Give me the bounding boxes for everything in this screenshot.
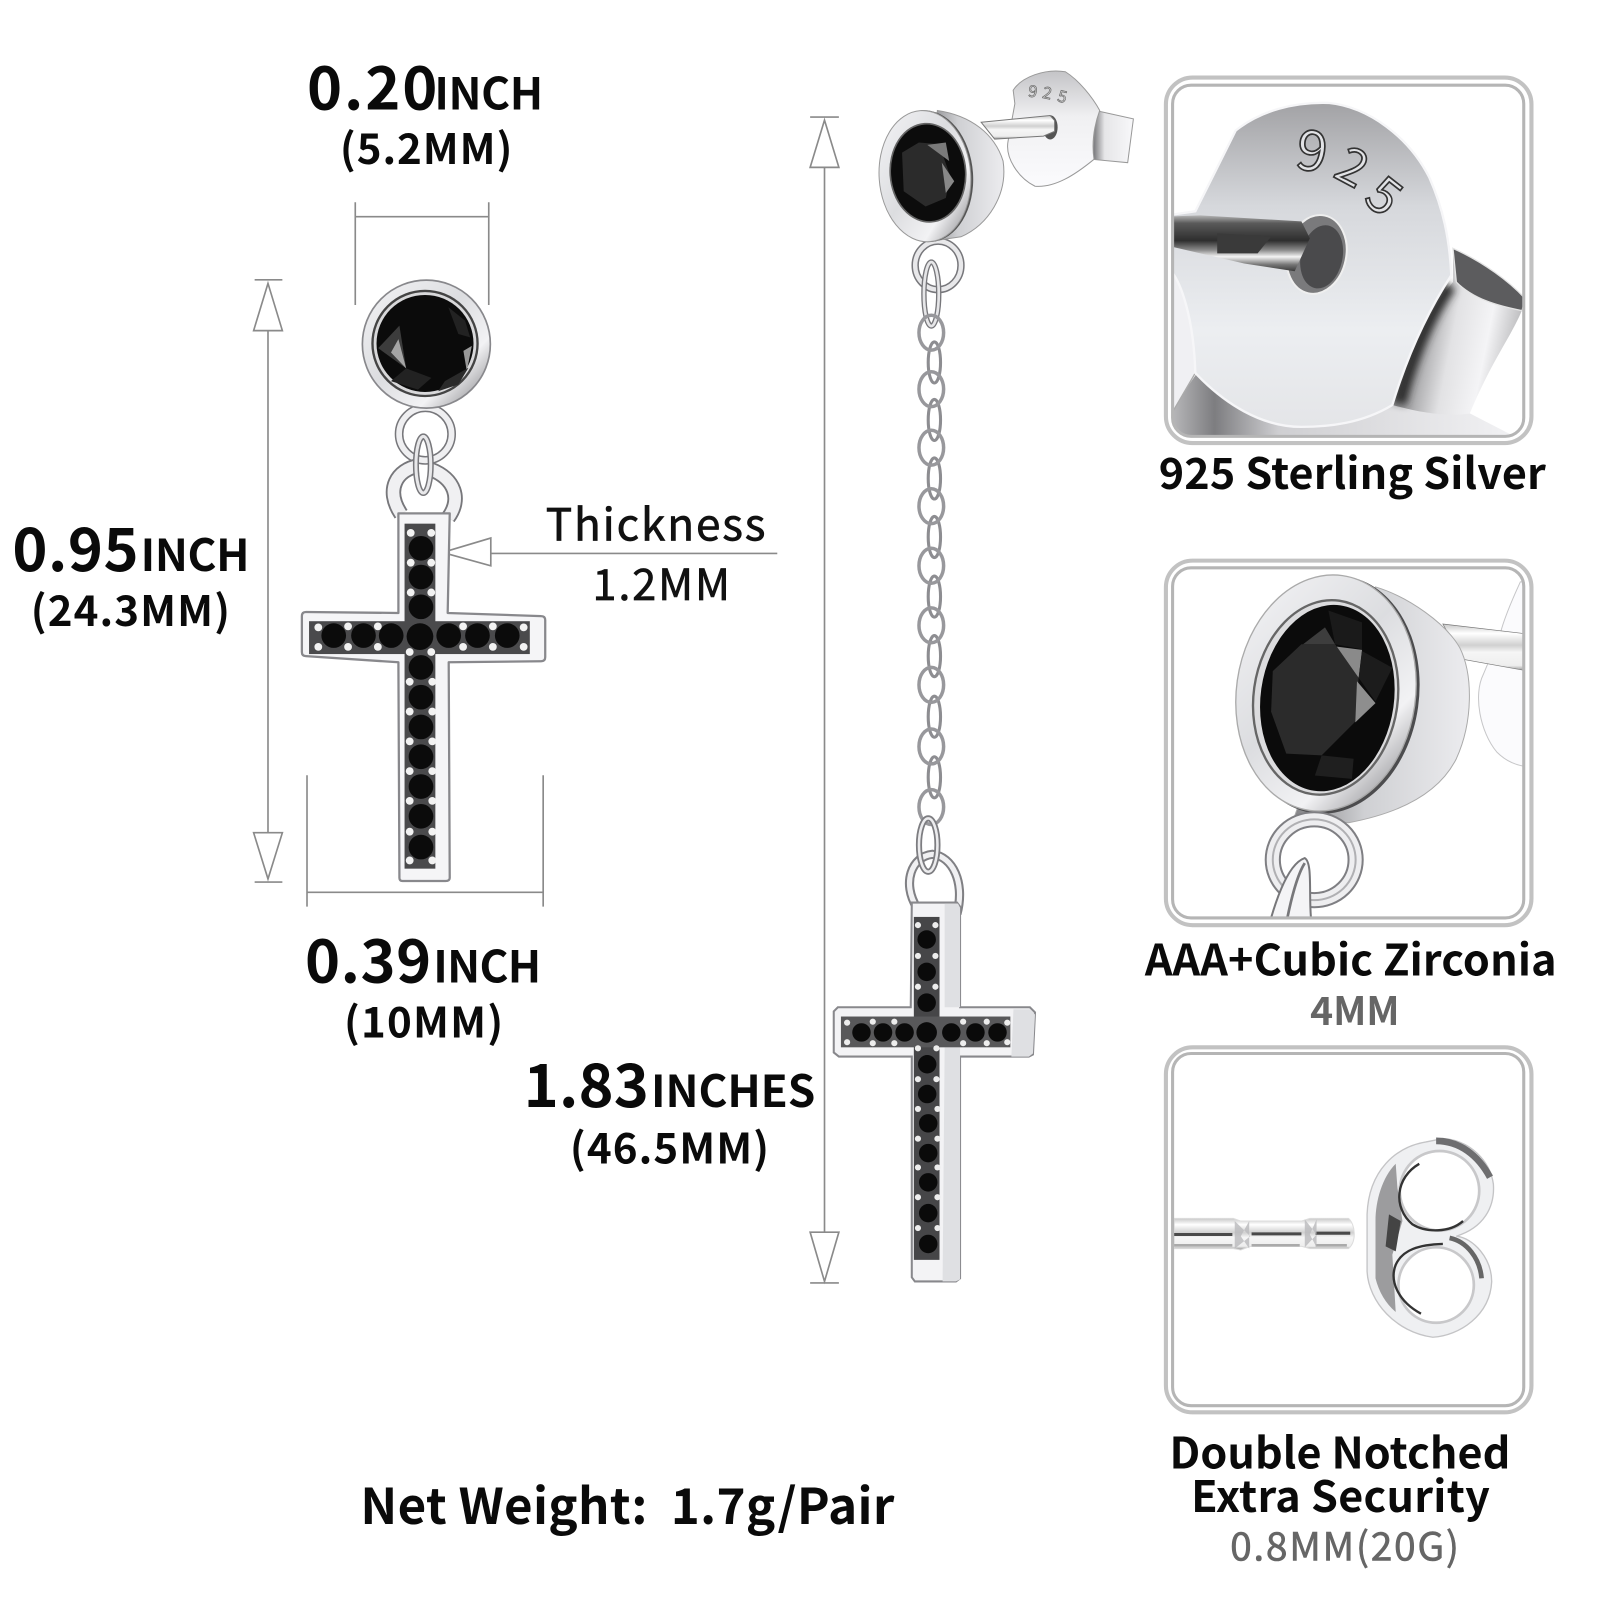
panel: 925 sterling silver close-up [1166, 78, 1531, 444]
label: stud width [307, 41, 543, 177]
long earring: cross stones [852, 930, 1007, 1253]
close-up image: ear nut back: 5 [1353, 155, 1420, 230]
panel frame: outer border [1166, 1047, 1531, 1412]
long earring: chain wide links [919, 315, 944, 825]
label: cross width: (10MM) [344, 990, 503, 1051]
label: stud width: (5.2MM) [340, 116, 512, 177]
long earring: lower ring and cross loop [910, 818, 960, 914]
label: short earring height: (24.3MM) [31, 578, 230, 639]
label: short earring height: 0.95 [12, 503, 139, 589]
dimension: width of cross [307, 775, 543, 907]
long earring: butterfly back with 925 stamp [981, 71, 1133, 186]
caption: cubic zirconia [1144, 926, 1557, 1037]
caption: cubic zirconia: 4MM [1310, 981, 1400, 1037]
label: thickness: 1.2MM [592, 551, 730, 613]
long earring: butterfly back with 925 stamp: 5 [1055, 83, 1070, 108]
label: net weight: Net Weight: 1.7g/Pair [360, 1468, 895, 1539]
dimension: height of short earring [254, 280, 282, 882]
close-up image: ear nut back: 2 [1325, 124, 1384, 202]
short earring: cross stones [321, 536, 520, 859]
label: stud width: INCH [434, 58, 543, 122]
close-up image: stone in bezel [1235, 574, 1522, 916]
long earring: stone channels [841, 917, 1010, 1260]
label: cross width [305, 915, 541, 1051]
label: long earring length [524, 1039, 815, 1176]
caption: double notched: 0.8MM(20G) [1230, 1517, 1459, 1573]
panel frame: inner border [1173, 568, 1524, 918]
caption: 925 sterling silver: 925 Sterling Silver [1159, 440, 1546, 502]
dimension: length of long earring [810, 117, 839, 1283]
short earring [302, 280, 545, 881]
close-up image: post and butterfly back [1174, 1139, 1494, 1337]
dimension: thickness arrow [443, 538, 777, 566]
label: stud width: 0.20 [307, 41, 437, 127]
caption: double notched: Double Notched [1170, 1419, 1510, 1481]
caption: double notched: Extra Security [1191, 1463, 1490, 1525]
panel: double notched post and back [1166, 1047, 1531, 1412]
close-up image: ear nut back [1172, 103, 1529, 444]
long earring: butterfly back with 925 stamp: 2 [1041, 79, 1055, 104]
label: long earring length: 1.83 [524, 1039, 649, 1125]
label: long earring length: (46.5MM) [570, 1115, 769, 1176]
label: short earring height: INCH [141, 520, 250, 584]
panel frame: inner border [1173, 85, 1524, 436]
long earring: cross side shading [943, 904, 1035, 1281]
close-up image: ear nut back: 9 [1292, 106, 1333, 189]
long earring: bezel with black stone [875, 107, 1004, 326]
panel frame: outer border [1166, 561, 1531, 925]
dimension: width of stud bezel [355, 202, 489, 305]
long earring: butterfly back with 925 stamp: 9 [1027, 78, 1039, 103]
panel frame: outer border [1166, 78, 1531, 443]
label: thickness [546, 490, 765, 613]
long earring: cross body [834, 903, 1035, 1281]
long earring: chain narrow links [928, 342, 941, 798]
short earring: stone channels [309, 524, 530, 869]
long earring: prongs [844, 922, 1010, 1231]
caption: cubic zirconia: AAA+Cubic Zirconia [1144, 926, 1557, 988]
panel frame: inner border [1173, 1053, 1524, 1406]
label: short earring height [12, 503, 250, 639]
label: long earring length: INCHES [651, 1056, 815, 1120]
short earring: jump rings [393, 408, 455, 518]
panel: cubic zirconia close-up [1166, 561, 1531, 925]
short earring: prongs [314, 529, 528, 864]
label: cross width: INCH [433, 932, 541, 996]
caption: double notched [1170, 1419, 1510, 1573]
long earring [834, 71, 1133, 1281]
label: thickness: Thickness [546, 490, 765, 554]
short earring: round bezel with black stone [362, 280, 490, 408]
short earring: cross body [302, 513, 545, 881]
label: cross width: 0.39 [305, 915, 431, 1001]
